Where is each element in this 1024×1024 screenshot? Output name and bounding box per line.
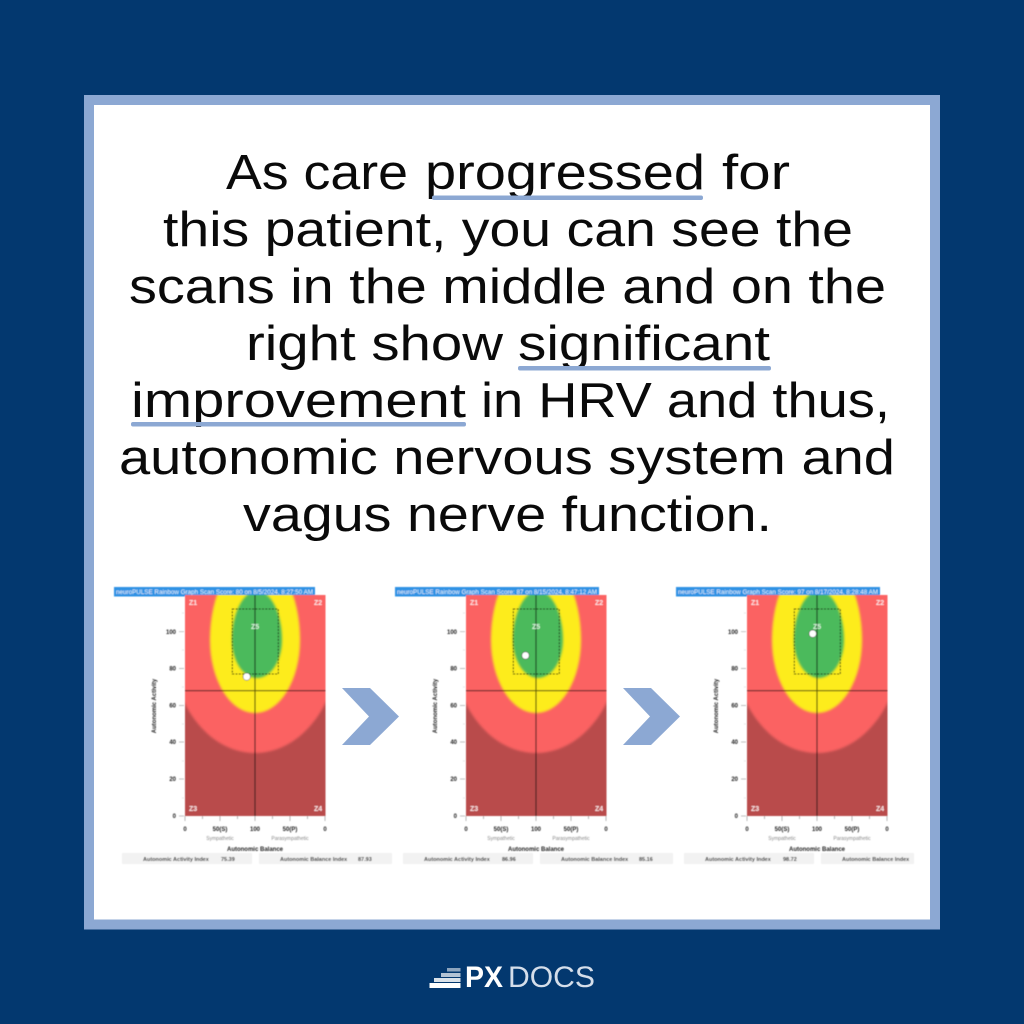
infographic canvas — [84, 95, 940, 988]
x axis: 100 — [812, 827, 823, 833]
chart title bar: neuroPULSE Rainbow Graph Scan Score: 87 on 8/15/2024, 8:47:12 AM — [397, 589, 597, 596]
logo: PX DOCS — [430, 961, 595, 994]
y axis: Autonomic Activity — [152, 678, 158, 733]
arrow 1 — [342, 688, 399, 745]
y axis: 0 — [173, 814, 177, 820]
x axis: 50(P) — [564, 827, 578, 833]
scan chart 3 — [675, 586, 914, 864]
score marker — [522, 652, 529, 659]
framed white panel — [89, 100, 935, 924]
x axis: 0 — [183, 827, 187, 833]
index table: 98.72 — [783, 857, 797, 863]
zone labels: Z4 — [595, 806, 603, 813]
x axis: Parasympathetic — [552, 836, 590, 842]
x axis: 100 — [531, 827, 542, 833]
zone labels: Z3 — [751, 806, 759, 813]
heading text: As care — [226, 146, 408, 200]
y axis: 100 — [728, 630, 739, 636]
heading text: in HRV and thus, — [481, 374, 890, 428]
wordmark: DOCS — [508, 961, 595, 994]
y axis: 80 — [731, 666, 739, 672]
rainbow zones — [465, 594, 608, 817]
zone labels: Z4 — [314, 806, 322, 813]
y axis: 100 — [447, 630, 458, 636]
y axis: 60 — [731, 704, 739, 710]
heading text: this patient, you can see the — [163, 203, 853, 257]
x axis: Autonomic Balance — [789, 847, 846, 853]
y axis: 0 — [735, 814, 739, 820]
zone labels: Z5 — [813, 624, 821, 631]
y axis — [714, 613, 746, 820]
heading text: vagus nerve function. — [243, 488, 772, 542]
index table: 87.93 — [358, 857, 372, 863]
x axis: 50(S) — [775, 827, 789, 833]
x axis: Autonomic Balance — [508, 847, 565, 853]
index table — [403, 853, 673, 864]
x axis: 0 — [885, 827, 889, 833]
y axis: 40 — [169, 740, 177, 746]
heading text — [119, 146, 895, 542]
x axis: 0 — [745, 827, 749, 833]
y axis — [433, 613, 465, 820]
zone labels — [189, 600, 322, 813]
zone labels: Z2 — [314, 600, 322, 607]
zone labels: Z1 — [751, 600, 759, 607]
scan chart 1 — [113, 586, 392, 864]
x axis: 50(P) — [845, 827, 859, 833]
index table: Autonomic Balance Index — [280, 857, 348, 863]
x axis: Sympathetic — [487, 836, 515, 842]
zone labels: Z4 — [876, 806, 884, 813]
wordmark: PX — [465, 961, 503, 994]
x axis: Parasympathetic — [833, 836, 871, 842]
score marker — [809, 630, 816, 637]
x axis: 100 — [250, 827, 261, 833]
heading text: scans in the middle and on the — [129, 260, 886, 314]
zone labels — [470, 600, 603, 813]
y axis: 80 — [169, 666, 177, 672]
y axis: 20 — [731, 777, 739, 783]
underline: progressed — [432, 196, 703, 200]
heading text: right show — [246, 317, 504, 371]
y axis: 60 — [169, 704, 177, 710]
index table: Autonomic Balance Index — [842, 857, 910, 863]
x axis: Sympathetic — [206, 836, 234, 842]
x axis — [745, 816, 889, 853]
heading text: autonomic nervous system and — [119, 431, 895, 485]
zone labels — [751, 600, 884, 813]
heading text: progressed — [425, 146, 705, 200]
x axis: Parasympathetic — [271, 836, 309, 842]
scan chart 2 — [394, 586, 673, 864]
heading text: improvement — [131, 374, 466, 428]
zone labels: Z3 — [189, 806, 197, 813]
x axis: 50(S) — [213, 827, 227, 833]
underline: significant — [518, 366, 771, 370]
index table: 75.39 — [221, 857, 235, 863]
index table — [684, 853, 914, 864]
y axis: 60 — [450, 704, 458, 710]
index table: Autonomic Activity Index — [705, 857, 772, 863]
score marker — [243, 673, 250, 680]
y axis: 80 — [450, 666, 458, 672]
zone labels: Z3 — [470, 806, 478, 813]
index table: Autonomic Activity Index — [143, 857, 210, 863]
x axis: 50(P) — [283, 827, 297, 833]
index table: Autonomic Balance Index — [561, 857, 629, 863]
zone labels: Z1 — [189, 600, 197, 607]
index table: 86.96 — [502, 857, 516, 863]
zone labels: Z1 — [470, 600, 478, 607]
zone labels: Z5 — [251, 624, 259, 631]
underline: improvement — [131, 422, 466, 426]
heading text: for — [722, 146, 790, 200]
y axis: 20 — [169, 777, 177, 783]
x axis: 50(S) — [494, 827, 508, 833]
y axis: 40 — [450, 740, 458, 746]
y axis: Autonomic Activity — [433, 678, 439, 733]
x axis — [464, 816, 608, 853]
index table — [122, 853, 392, 864]
arrow 2 — [623, 688, 680, 745]
y axis: 40 — [731, 740, 739, 746]
y axis: 0 — [454, 814, 458, 820]
chart title bar: neuroPULSE Rainbow Graph Scan Score: 97 on 8/17/2024, 8:28:48 AM — [678, 589, 878, 596]
zone labels: Z2 — [876, 600, 884, 607]
x axis: 0 — [604, 827, 608, 833]
index table: 85.16 — [639, 857, 653, 863]
y axis — [152, 613, 184, 820]
y axis: 20 — [450, 777, 458, 783]
rainbow zones — [746, 594, 888, 817]
x axis: Autonomic Balance — [227, 847, 284, 853]
wordmark — [465, 961, 595, 994]
zone labels: Z5 — [532, 624, 540, 631]
zone labels: Z2 — [595, 600, 603, 607]
x axis — [183, 816, 327, 853]
x axis: Sympathetic — [768, 836, 796, 842]
index table: Autonomic Activity Index — [424, 857, 491, 863]
y axis: Autonomic Activity — [714, 678, 720, 733]
rainbow zones — [184, 594, 326, 817]
heading text: significant — [518, 317, 770, 371]
x axis: 0 — [323, 827, 327, 833]
icon: stairs — [430, 968, 460, 988]
chart title bar: neuroPULSE Rainbow Graph Scan Score: 80 on 8/5/2024, 8:27:50 AM — [116, 589, 313, 596]
x axis: 0 — [464, 827, 468, 833]
y axis: 100 — [166, 630, 177, 636]
